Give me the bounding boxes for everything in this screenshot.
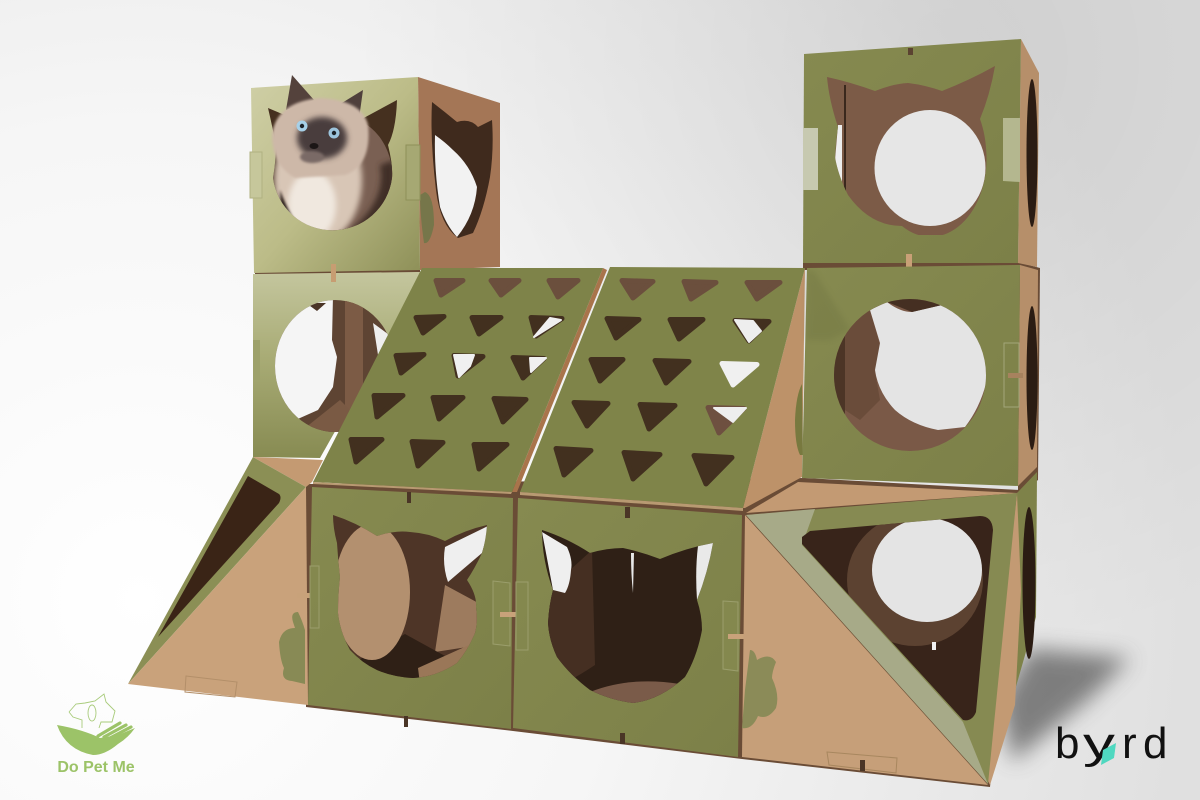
far side <box>1015 472 1037 690</box>
far side opening <box>1022 507 1036 659</box>
fingers <box>98 723 131 738</box>
tab left <box>310 566 319 628</box>
pin <box>297 593 318 598</box>
slot <box>860 760 865 771</box>
silver diagonal strip <box>746 509 988 784</box>
round opening <box>830 295 990 455</box>
panel: top-left cube <box>250 75 500 282</box>
base edges behind panels <box>255 262 1040 787</box>
side face <box>418 77 500 270</box>
left eye <box>296 120 308 132</box>
lower highlight <box>520 492 743 511</box>
wedge olive face <box>128 457 306 684</box>
wedge top <box>746 482 1018 513</box>
wedge bevel <box>985 493 1021 785</box>
teal book mark <box>1101 743 1116 765</box>
wedge top <box>253 457 323 487</box>
cat body in opening <box>273 125 392 230</box>
tab right <box>1003 118 1020 182</box>
tab left <box>516 582 528 650</box>
panel: right middle cube <box>802 265 1038 486</box>
side face <box>1018 265 1038 486</box>
tab right <box>493 581 510 646</box>
panel: right top cube <box>803 39 1039 276</box>
panel: left wedge <box>128 457 323 705</box>
muzzle <box>300 151 324 163</box>
letters r and d: r <box>1122 719 1137 768</box>
slot <box>908 48 913 55</box>
panel: right wedge <box>742 472 1037 785</box>
cat-head opening <box>542 530 713 703</box>
tab left <box>803 128 818 190</box>
side face <box>1018 39 1039 267</box>
hand leaf <box>57 725 135 755</box>
panel: bottom cube B <box>513 498 755 757</box>
logo: Do Pet Me <box>57 694 135 776</box>
pin <box>728 634 755 639</box>
slot <box>407 492 411 503</box>
triangle openings <box>351 280 578 469</box>
mouse mark <box>742 650 777 728</box>
ramp face <box>313 268 603 492</box>
nose <box>310 143 318 149</box>
background gaps <box>542 532 572 593</box>
tab <box>253 340 260 380</box>
round opening <box>275 300 388 432</box>
right ear <box>337 90 363 126</box>
ramp edge <box>512 268 607 492</box>
front face <box>803 39 1021 263</box>
opening <box>802 516 993 720</box>
notch <box>185 676 237 697</box>
front face <box>251 77 420 273</box>
pin <box>1008 373 1023 378</box>
mouse mark <box>420 192 434 243</box>
side cat-head opening <box>432 102 493 238</box>
panel: ramp 2 <box>520 267 805 511</box>
letter y: y <box>1083 718 1116 768</box>
pin <box>500 612 525 617</box>
pin <box>906 254 912 276</box>
side opening <box>1026 306 1038 450</box>
logo text: Do Pet Me <box>57 759 135 776</box>
tab <box>250 152 262 198</box>
mouse mark on ramp side <box>795 384 803 455</box>
lower highlight <box>313 482 512 494</box>
tab <box>1004 343 1019 407</box>
side opening background gap <box>435 135 477 237</box>
small slot <box>932 642 936 650</box>
panel: ramp 2 side <box>743 268 805 508</box>
left ear <box>286 75 314 110</box>
pet ear <box>88 705 96 721</box>
mouse mark <box>279 612 305 684</box>
background gaps through openings <box>454 318 561 377</box>
wedge opening <box>158 476 280 637</box>
front face <box>802 265 1020 486</box>
face fur <box>272 98 369 178</box>
panel: ramp 1 <box>313 268 607 494</box>
panel: bottom cube A <box>308 487 525 729</box>
notch <box>827 752 897 773</box>
slot <box>625 507 630 518</box>
pet outline <box>69 694 115 728</box>
triangle openings <box>556 280 780 484</box>
brown side <box>742 515 988 785</box>
wedge brown side <box>128 487 308 705</box>
background gaps through openings <box>714 320 761 422</box>
logo: byrd <box>1055 718 1167 768</box>
cat opening <box>268 100 397 230</box>
cat-head opening <box>333 515 487 678</box>
right eye <box>328 128 340 138</box>
floor shadow <box>1000 648 1130 762</box>
shadow from ramp <box>806 268 850 340</box>
dark mask <box>297 117 347 159</box>
tab right <box>723 601 738 671</box>
cat-head opening <box>820 60 1000 235</box>
olive frame <box>746 493 1017 784</box>
cat head <box>272 75 369 178</box>
side opening <box>1026 79 1038 227</box>
letters r and d: d <box>1143 719 1167 768</box>
letter b: b <box>1055 719 1079 768</box>
panel: mid-left cube <box>253 272 425 458</box>
